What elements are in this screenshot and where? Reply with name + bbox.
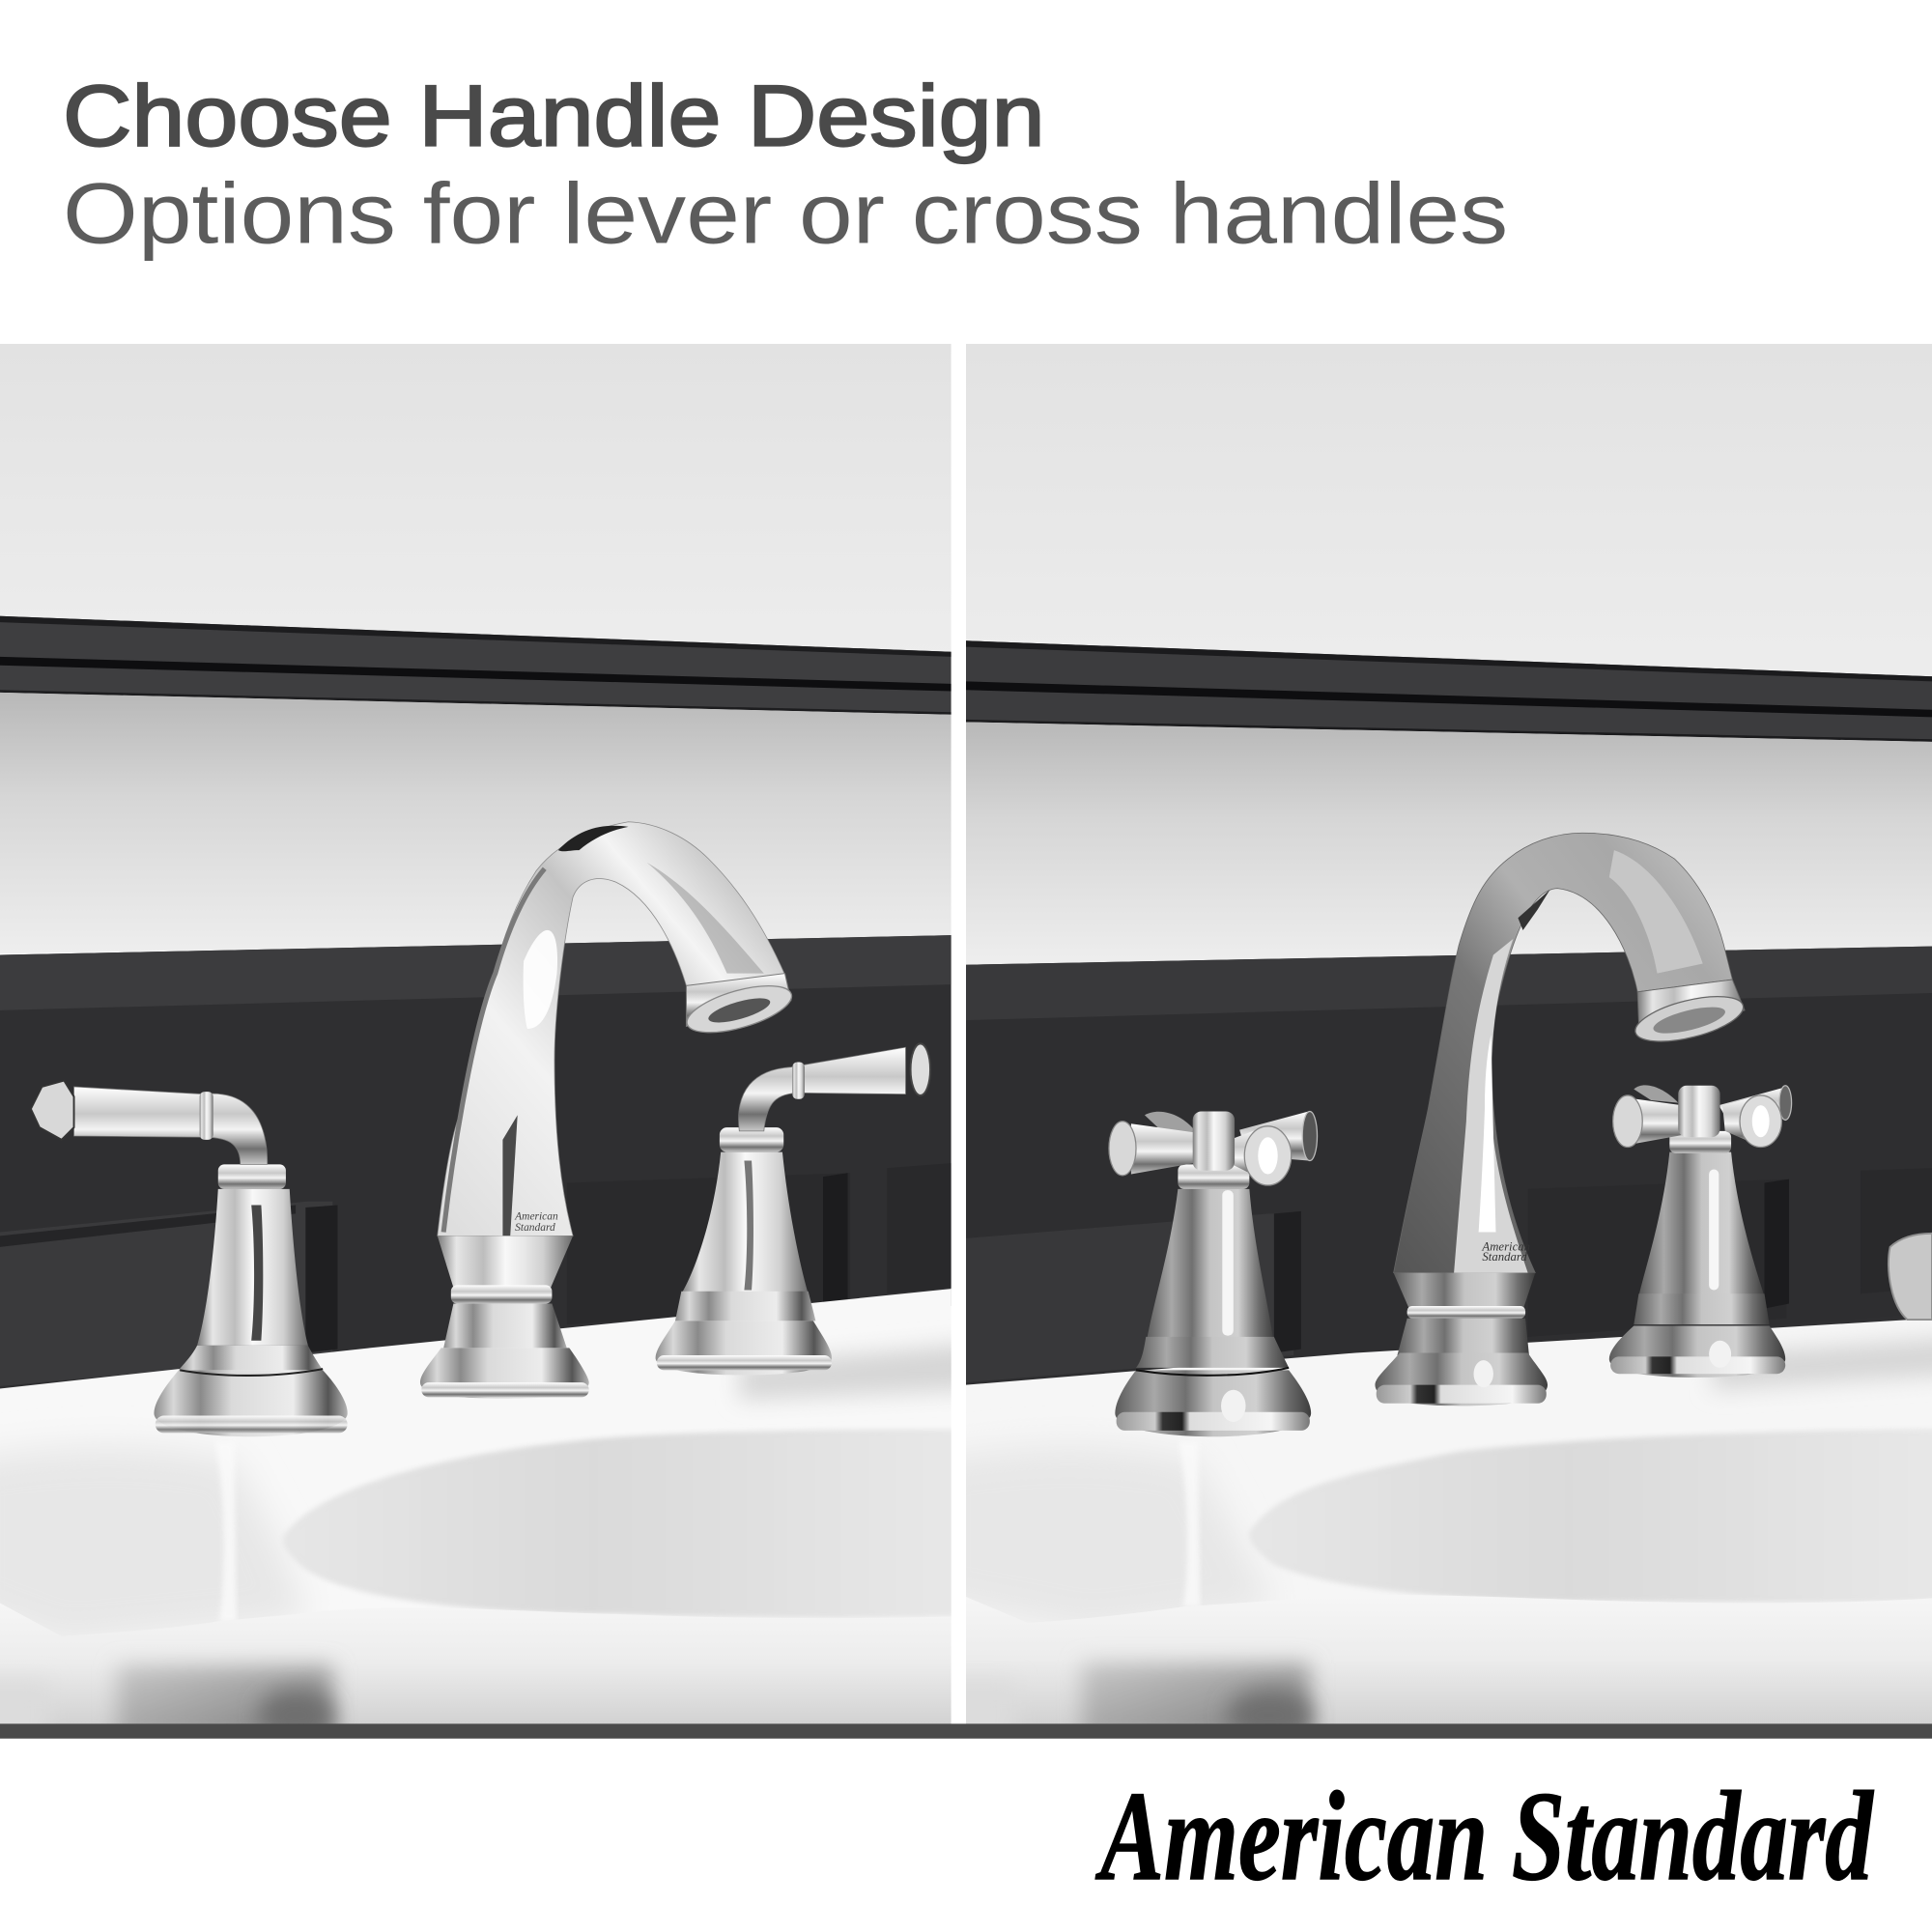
blurred foreground shadow (117, 1665, 332, 1740)
spout logo text: American (514, 1211, 558, 1223)
lower wall (0, 693, 952, 953)
front rim (966, 1595, 1932, 1723)
sink basin (283, 1430, 974, 1618)
left rim shading (0, 1719, 39, 1723)
divider bar (0, 1723, 1932, 1739)
spout highlights (1454, 939, 1528, 1273)
dark wainscot (966, 947, 1932, 1386)
spout logo text (1482, 1242, 1529, 1261)
spout collar and base (1375, 1273, 1548, 1406)
spout logo text: Standard (1482, 1250, 1527, 1264)
subheading: options: Options for lever or cross handles (63, 164, 1508, 261)
lever (74, 1087, 268, 1164)
panel: cross handle faucet photo (929, 344, 1932, 1756)
mirror frame (0, 616, 952, 715)
faucet: left cross handle (1109, 1112, 1318, 1436)
left rim shading (966, 1719, 1005, 1723)
faucet: left lever handle (31, 1081, 348, 1436)
panel: lever handle faucet photo (0, 344, 974, 1756)
lower wall (966, 722, 1932, 965)
reflection on counter (220, 1458, 236, 1620)
front rim (0, 1603, 952, 1723)
heading: choose handle design: Choose Handle Design (63, 68, 1045, 164)
upper wall / mirror (966, 344, 1932, 689)
counter soft shading (929, 1337, 1932, 1633)
spout logo text: Standard (515, 1222, 555, 1234)
spout head (686, 973, 792, 1034)
spout logo text (514, 1212, 558, 1231)
upper wall / mirror (0, 344, 952, 658)
spout logo text: American (1481, 1240, 1530, 1254)
spout head (1634, 980, 1745, 1042)
cross arms (1719, 1087, 1786, 1127)
sink basin (1249, 1430, 1932, 1603)
counter soft shading (0, 1343, 974, 1645)
faucet: right lever handle (656, 1043, 930, 1375)
mirror frame (966, 640, 1932, 742)
sink counter (0, 1289, 951, 1393)
dark wainscot (0, 935, 952, 1392)
spout collar and base (420, 1236, 589, 1399)
cross arms (1239, 1112, 1309, 1161)
glass bowl (1889, 1234, 1932, 1320)
reflection on counter (1184, 1455, 1200, 1605)
spout highlights (558, 826, 629, 851)
faucet: cross spout (1375, 833, 1747, 1406)
blurred foreground shadow (1082, 1663, 1311, 1740)
lever (739, 1047, 906, 1131)
faucet: lever spout (420, 822, 797, 1399)
faucet: right cross handle (1609, 1085, 1792, 1378)
title (63, 68, 1508, 261)
sink counter (966, 1320, 1932, 1600)
